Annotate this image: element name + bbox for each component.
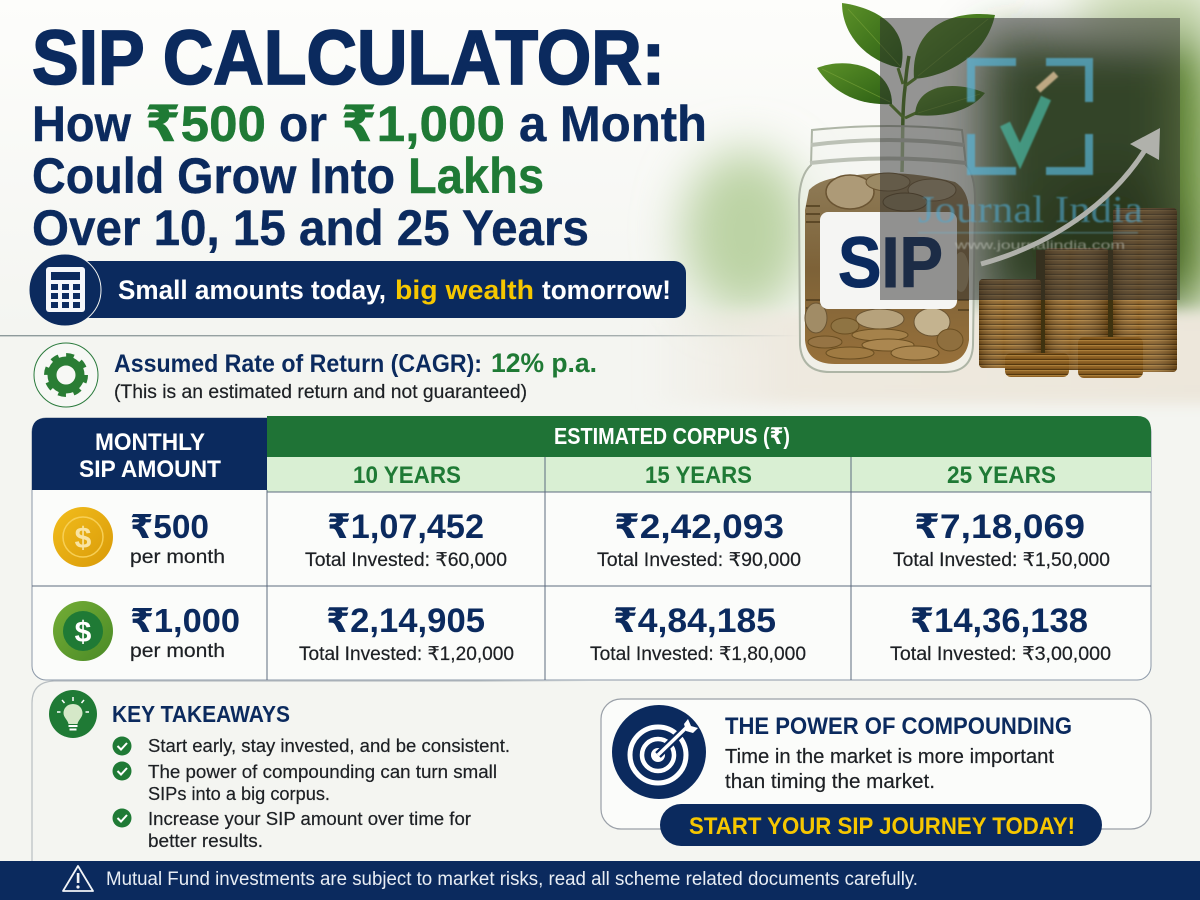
takeaway: power of compounding: The power of compounding can turn small <box>148 761 497 782</box>
takeaway: power of compounding: SIPs into a big corpus. <box>148 783 330 804</box>
takeaway: increase SIP <box>112 808 471 851</box>
row: 1000 per month: Total Invested: ₹3,00,000 <box>890 644 1111 665</box>
rate text <box>114 348 597 403</box>
row: 500 per month: Total Invested: ₹90,000 <box>597 550 801 571</box>
header: year columns: 25 YEARS <box>947 462 1056 489</box>
row: 1000 per month: ₹14,36,138 <box>910 602 1088 640</box>
compounding text: Time in the market is more important <box>725 746 1054 768</box>
title: SIP Calculator: or <box>279 96 327 152</box>
plant <box>817 3 995 172</box>
compounding text: than timing the market. <box>725 771 935 793</box>
tagline text: big wealth <box>395 275 534 305</box>
assumed rate of return <box>34 343 597 407</box>
header: monthly SIP amount: MONTHLY <box>95 429 205 456</box>
row: 1000 per month: ₹2,14,905 <box>326 602 485 640</box>
icon: gear <box>34 343 98 407</box>
SIP jar label <box>820 212 957 309</box>
call to action button <box>660 804 1102 846</box>
header: year columns: 10 YEARS <box>353 462 461 489</box>
divider line <box>0 335 800 336</box>
watermark text: Journal India <box>918 189 1143 231</box>
icon: calculator <box>29 254 101 326</box>
rate text: (This is an estimated return and not guaranteed) <box>114 382 527 403</box>
row: 1000 per month <box>53 601 1111 665</box>
header: year columns: 15 YEARS <box>645 462 752 489</box>
takeaway: increase SIP: better results. <box>148 830 263 851</box>
compounding text: THE POWER OF COMPOUNDING <box>725 713 1072 740</box>
footer disclaimer: Mutual Fund investments are subject to market risks, read all scheme related documents carefully. <box>106 869 918 890</box>
panel: key takeaways <box>32 681 590 861</box>
watermark: Journal India <box>880 18 1180 300</box>
header: estimated corpus: ESTIMATED CORPUS (₹) <box>554 423 790 449</box>
row: 500 per month <box>53 507 1110 571</box>
row: 500 per month: per month <box>130 547 225 568</box>
icon: green dollar coin <box>53 601 113 661</box>
icon: gold dollar coin: $ <box>75 522 92 555</box>
icon: target with arrow <box>612 705 706 799</box>
row: 500 per month: Total Invested: ₹1,50,000 <box>893 550 1110 571</box>
header: year columns <box>267 457 1151 492</box>
coin stacks <box>979 208 1177 378</box>
row: 1000 per month: ₹1,000 <box>130 602 240 639</box>
title: SIP Calculator: ₹500 <box>145 96 266 152</box>
takeaway: start early: Start early, stay invested, and be consistent. <box>148 735 510 756</box>
watermark text <box>918 189 1143 252</box>
title: SIP Calculator: SIP CALCULATOR: <box>32 15 665 101</box>
title: SIP Calculator <box>32 15 707 256</box>
row: 500 per month: ₹500 <box>130 508 209 545</box>
row: 1000 per month: Total Invested: ₹1,80,000 <box>590 644 806 665</box>
rate text: 12% p.a. <box>491 348 597 378</box>
title: SIP Calculator: a Month <box>519 96 707 152</box>
title: SIP Calculator: Lakhs <box>408 148 544 204</box>
panel: power of compounding <box>601 699 1151 846</box>
SIP jar label: SIP <box>838 224 943 303</box>
SIP corpus table <box>32 416 1151 680</box>
title: SIP Calculator: How <box>32 96 131 152</box>
tagline text <box>118 275 671 305</box>
icon: warning triangle <box>63 866 93 891</box>
icon: light bulb <box>49 690 97 738</box>
photo background: blurred foliage and table <box>0 0 1200 404</box>
arrow: growth trend <box>981 128 1160 264</box>
call to action button: START YOUR SIP JOURNEY TODAY! <box>689 813 1075 840</box>
row: 1000 per month: ₹4,84,185 <box>613 602 776 640</box>
compounding text <box>725 713 1072 793</box>
jar with coins <box>799 126 975 372</box>
takeaway: increase SIP: Increase your SIP amount over time for <box>148 808 471 829</box>
row: 1000 per month: Total Invested: ₹1,20,000 <box>299 644 514 665</box>
header: estimated corpus <box>267 416 1151 457</box>
photo: plant growing from coin jar <box>799 3 1177 378</box>
tagline banner <box>29 254 686 326</box>
row: 500 per month: ₹1,07,452 <box>327 508 484 546</box>
icon: gold dollar coin <box>53 507 113 567</box>
rate text: Assumed Rate of Return (CAGR): <box>114 350 482 378</box>
icon: logo brackets and check <box>971 62 1089 171</box>
title: SIP Calculator: Over 10, 15 and 25 Years <box>32 200 589 256</box>
title: SIP Calculator: ₹1,000 <box>341 96 505 152</box>
title: SIP Calculator: Could Grow Into <box>32 148 395 204</box>
tagline text: Small amounts today, <box>118 275 386 305</box>
heading: KEY TAKEAWAYS <box>112 701 290 727</box>
row: 500 per month: ₹7,18,069 <box>914 508 1085 546</box>
header: monthly SIP amount <box>32 418 267 490</box>
header: monthly SIP amount: SIP AMOUNT <box>79 456 221 483</box>
icon: green dollar coin: $ <box>75 616 92 649</box>
watermark text: www.journalindia.com <box>954 238 1125 252</box>
row: 1000 per month: per month <box>130 641 225 662</box>
row: 500 per month: Total Invested: ₹60,000 <box>305 550 507 571</box>
tagline text: tomorrow! <box>542 275 671 305</box>
row: 500 per month: ₹2,42,093 <box>614 508 784 546</box>
takeaway: power of compounding <box>112 761 497 804</box>
footer disclaimer <box>0 861 1200 900</box>
